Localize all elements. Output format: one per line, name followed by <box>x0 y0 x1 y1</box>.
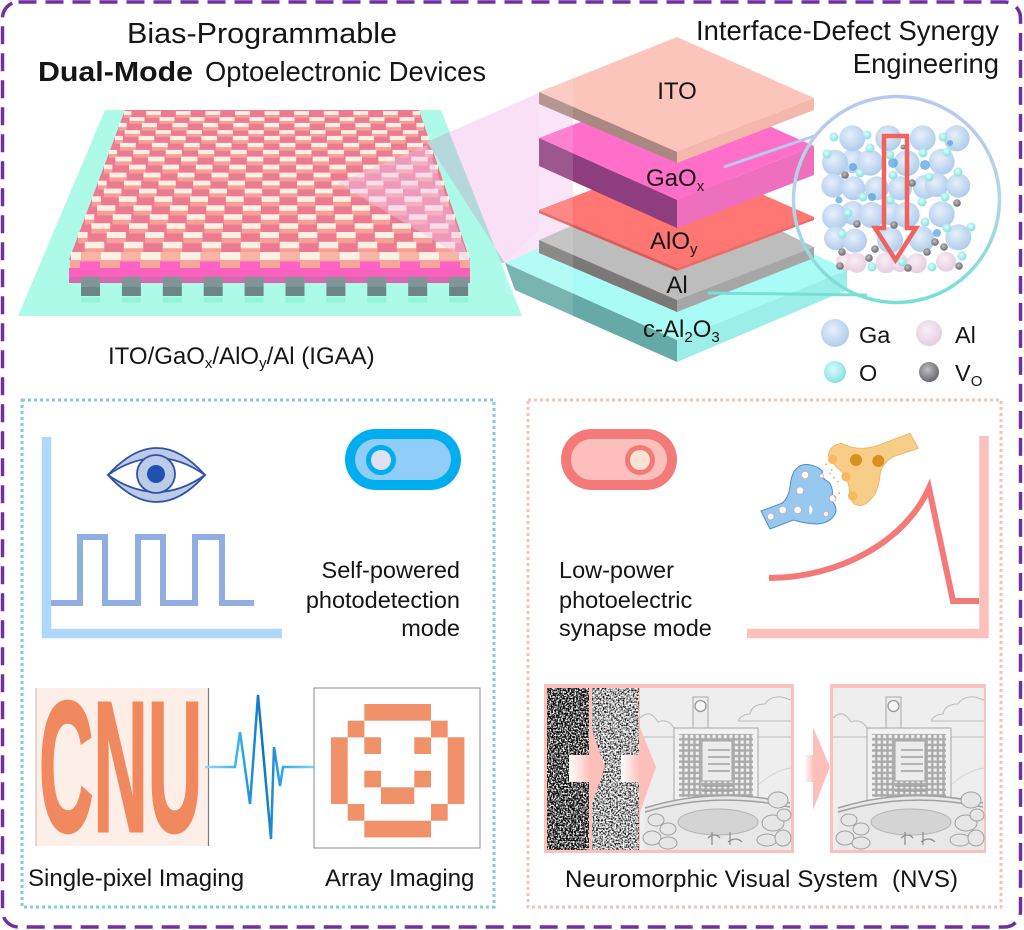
title: device: Dual-Mode <box>38 56 193 87</box>
layer: AlOy <box>539 157 814 271</box>
magenta GaOx band <box>69 268 470 283</box>
panel: self-powered photodetection <box>22 400 494 907</box>
legend: O <box>971 373 982 390</box>
legend: Al <box>955 322 976 348</box>
legend <box>821 319 982 390</box>
title: device: Bias-Programmable <box>127 18 397 50</box>
icon: toggle switch left <box>345 429 461 490</box>
atoms: oxygen vacancies <box>836 144 963 272</box>
layer labels: GaO <box>646 165 697 192</box>
layer labels <box>643 78 720 346</box>
atoms: O <box>822 130 976 272</box>
device caption: ITO/GaO <box>108 343 205 370</box>
chart axes <box>46 437 282 634</box>
signal waveform <box>205 695 320 839</box>
panel: photoelectric synapse <box>528 400 1001 907</box>
icon: toggle switch right <box>561 429 677 490</box>
layer: Al <box>539 180 814 312</box>
arrow: defect gradient <box>875 136 916 260</box>
device caption: x <box>205 355 213 372</box>
icon: synapse <box>761 433 918 529</box>
mode label: mode <box>401 615 460 641</box>
crossbar device array <box>18 110 522 316</box>
layer labels: c-Al <box>643 316 684 343</box>
device caption: y <box>259 355 267 372</box>
array image smiley <box>314 688 480 848</box>
atoms: blue overlap patches <box>836 140 953 237</box>
zoom callout lines <box>708 135 867 295</box>
denoised stage <box>592 688 639 850</box>
layer labels: O <box>693 316 711 343</box>
layer labels: x <box>697 178 705 195</box>
title: device <box>38 18 486 87</box>
legend: Ga <box>859 322 891 348</box>
atoms: Al <box>836 252 956 273</box>
mode label <box>559 557 712 641</box>
mode label <box>306 557 460 641</box>
legend: V <box>955 360 971 386</box>
layer: sapphire substrate <box>505 188 847 362</box>
icon: eye <box>108 448 205 502</box>
ITO and GaOx checker grid <box>69 110 470 268</box>
atomic lens <box>794 96 1000 302</box>
mode label: photoelectric <box>559 587 692 613</box>
title: device: Optoelectronic Devices <box>205 56 486 87</box>
noisy stage <box>547 688 589 850</box>
layer labels: AlO <box>650 228 690 255</box>
atoms: Ga <box>821 125 971 253</box>
NVS output image frame <box>830 684 986 853</box>
title: interface-defect synergy: Engineering <box>853 48 999 79</box>
title: interface-defect synergy <box>696 15 999 79</box>
gray Al bottom electrodes <box>81 282 469 300</box>
imaging captions: Array Imaging <box>325 865 474 892</box>
square-wave photoresponse <box>51 537 254 603</box>
layer: GaOx <box>539 85 814 228</box>
layer labels: 2 <box>684 329 693 346</box>
arrow: between frames <box>804 727 830 810</box>
highlighted cell region <box>338 145 470 262</box>
mode label: photodetection <box>306 587 460 613</box>
mode label: Self-powered <box>322 557 460 583</box>
device caption: /Al (IGAA) <box>267 343 375 370</box>
single-pixel image CNU: CNU <box>39 665 202 872</box>
arrow: stage two <box>621 725 656 815</box>
legend: O <box>859 360 877 386</box>
layer labels: 3 <box>711 329 720 346</box>
layer stack <box>505 37 847 362</box>
layer labels: Al <box>666 272 688 299</box>
mode label: Low-power <box>559 557 674 583</box>
arrow: stage one <box>569 722 605 812</box>
mode label: synapse mode <box>559 615 712 641</box>
synaptic response curve <box>769 488 979 601</box>
device caption: /AlO <box>212 343 259 370</box>
imaging captions <box>28 865 474 892</box>
NVS image frame with denoising stages <box>544 684 794 853</box>
layer labels: y <box>690 241 698 258</box>
clean scene <box>640 688 791 850</box>
layer labels: ITO <box>657 78 697 105</box>
layer: ITO <box>539 37 814 163</box>
projection beam from device to stack <box>427 78 573 263</box>
title: interface-defect synergy: Interface-Defect Synergy <box>696 15 999 46</box>
transparent substrate <box>18 110 522 316</box>
NVS caption: Neuromorphic Visual System (NVS) <box>565 866 958 893</box>
imaging captions: Single-pixel Imaging <box>28 865 244 892</box>
chart axes <box>747 436 984 634</box>
